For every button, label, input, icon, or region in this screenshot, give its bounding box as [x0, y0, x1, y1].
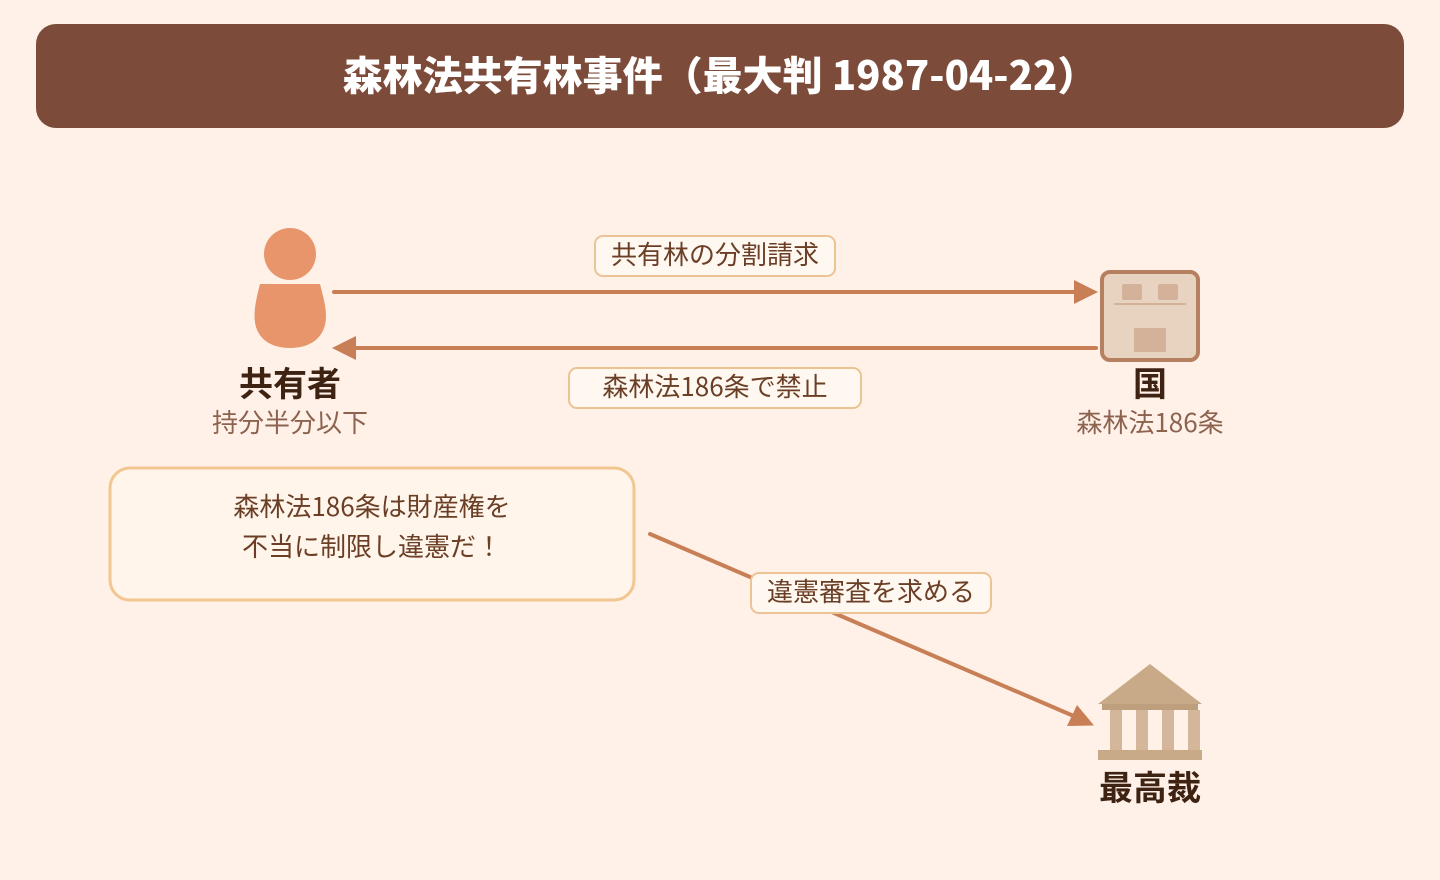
- label: co-owner: 共有者: [239, 357, 341, 406]
- arrow: constitutional review to supreme court: [650, 534, 1094, 726]
- icon: supreme court building: [1098, 664, 1202, 760]
- arrow label: partition request: 共有林の分割請求: [611, 235, 819, 272]
- arrow label: constitutional review: 違憲審査を求める: [767, 572, 975, 609]
- arrow label: prohibited by forest law: 森林法186条で禁止: [602, 367, 828, 404]
- speech callout: [108, 466, 636, 602]
- title banner: [36, 24, 1404, 128]
- callout text line 1: 森林法186条は財産権を: [233, 487, 511, 524]
- icon: state building: [1102, 272, 1198, 360]
- arrow: prohibition from state to co-owner: [332, 336, 1096, 360]
- label: supreme court: 最高裁: [1099, 761, 1201, 810]
- callout text line 2: 不当に制限し違憲だ！: [242, 527, 502, 564]
- icon: co-owner person: [254, 228, 326, 348]
- arrow: partition request from co-owner to state: [334, 280, 1098, 304]
- sublabel: forest law article: 森林法186条: [1076, 403, 1224, 440]
- title: 森林法共有林事件（最大判 1987-04-22）: [343, 44, 1097, 102]
- sublabel: co-owner share: 持分半分以下: [212, 403, 368, 440]
- label: state: 国: [1133, 357, 1167, 406]
- arrow label: prohibited by forest law: [568, 367, 862, 409]
